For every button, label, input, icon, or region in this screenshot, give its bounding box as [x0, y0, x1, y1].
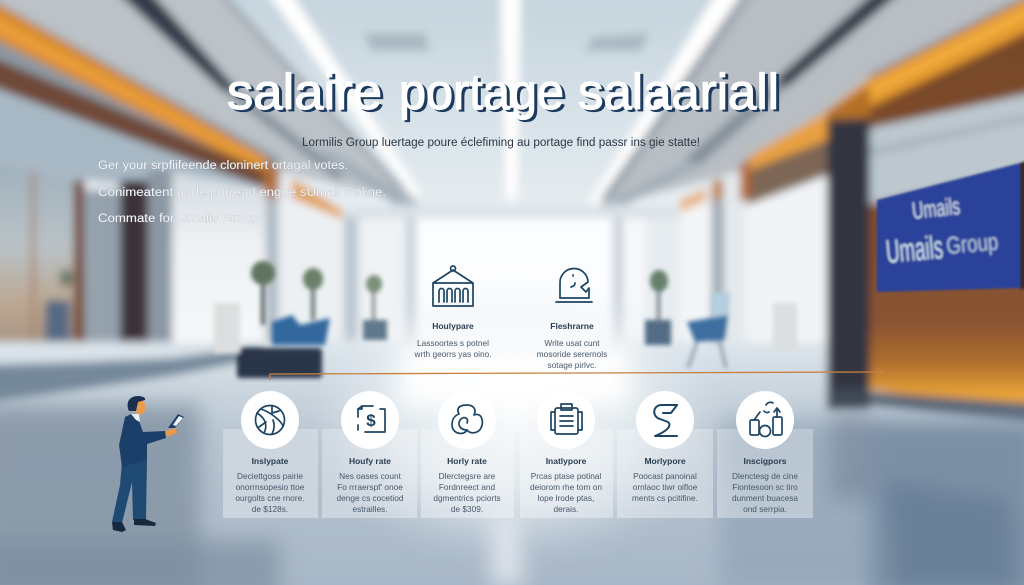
icon: chat laptop: [556, 268, 592, 302]
title: salaire: [230, 66, 385, 122]
title: salaire: [227, 64, 382, 120]
feature: Fleshrame: Wrlte usat cunt: [544, 338, 600, 348]
left glass door: [0, 160, 85, 375]
card: Inslypate: de $128s.: [252, 504, 288, 514]
card: Horly rate: dgmentrics pciorts: [433, 493, 501, 503]
left structural columns: [85, 190, 120, 355]
centre white opening: [415, 218, 615, 343]
wall sign: Umails Group: Umails: [911, 193, 961, 225]
card: Horly rate: Dlerctegsre are: [439, 471, 496, 481]
card: Inatlypore: [520, 391, 613, 518]
card: Inscigpors: ond serrpia.: [743, 504, 787, 514]
title: portage: [402, 66, 567, 122]
card: Inscigpors: [717, 391, 813, 518]
card: Morlypore: Morlypore: [644, 456, 686, 466]
feature: Houlypare: Houlypare: [432, 321, 474, 331]
person with phone: [112, 396, 184, 532]
back left walls: [172, 172, 266, 362]
icon: clipboard: [537, 391, 595, 449]
card: Houfy rate: Nes oases count: [339, 471, 402, 481]
card: Inslypate: [223, 391, 318, 518]
title: salaariall: [581, 66, 782, 122]
card: Inatlypore: Inatlypore: [546, 456, 587, 466]
card: Houfy rate: Fo rrraerspf' onoe: [337, 482, 403, 492]
wall sign: Umails Group: [877, 161, 1024, 292]
title: [227, 64, 782, 122]
left text block: [98, 160, 386, 225]
card: Inatlypore: deiorom rhe tom on: [530, 482, 602, 492]
legs: [112, 458, 147, 523]
feature: Fleshrame: Fleshrarne: [550, 321, 594, 331]
feature: Houlypare: Lassoortes s potnel: [417, 338, 489, 348]
wall sign: Umails Group: Group: [945, 229, 999, 260]
feature: Fleshrame: sotage pirlvc.: [548, 360, 596, 370]
card: Houfy rate: $: [366, 411, 376, 430]
floor: [0, 342, 1024, 585]
card: Inslypate: ourgolts cne rnore.: [235, 493, 305, 503]
title: salaariall: [578, 64, 779, 120]
card: Houfy rate: estrailles.: [352, 504, 388, 514]
icon: chart with coin: [736, 391, 794, 449]
ceiling lights: [258, 0, 422, 198]
jacket: [119, 414, 166, 467]
left wall top bands: [0, 0, 280, 190]
card: Inslypate: onorrnsopesio ttoe: [236, 482, 305, 492]
card: Houfy rate: [322, 391, 417, 518]
feature: Houlypare: [413, 266, 492, 359]
left text block: Commate for Umails Group: [98, 213, 259, 225]
card: Horly rate: Fordnreect and: [439, 482, 496, 492]
title: portage: [399, 64, 564, 120]
card: Inatlypore: lope lrode ptas,: [538, 493, 594, 503]
feature: Fleshrame: mosoride serernols: [537, 349, 607, 359]
feature: Houlypare: wrth georrs yas oino.: [413, 349, 492, 359]
grey bands above sign: [870, 90, 1024, 205]
hand and phone: [165, 428, 177, 437]
card: Morlypore: ments cs pcitifine.: [632, 493, 698, 503]
card: Inslypate: Deciettgoss pairie: [237, 471, 303, 481]
card: Inslypate: Inslypate: [252, 456, 289, 466]
card: Morlypore: ornlaoc tiwr oifloe: [633, 482, 698, 492]
head: [134, 400, 146, 414]
card: Inscigpors: dunment buacesa: [732, 493, 798, 503]
ceiling: [150, 0, 880, 215]
card: Inatlypore: Prcas ptase potinal: [531, 471, 601, 481]
connector arrow: [270, 370, 883, 380]
icon: dollar document: [341, 391, 399, 449]
card: Inscigpors: Fiontesoon sc tiro: [732, 482, 798, 492]
card: Inscigpors: Inscigpors: [744, 456, 787, 466]
shoes: [112, 519, 156, 532]
icon: building: [433, 266, 473, 306]
icon: linked cloud: [438, 391, 496, 449]
card: Horly rate: Horly rate: [447, 456, 487, 466]
card: Houfy rate: Houfy rate: [349, 456, 391, 466]
right ceiling slab: [600, 0, 1024, 208]
card: Horly rate: de $309.: [451, 504, 483, 514]
left text block: Ger your srpfiifeende cloninert ortagal votes.: [98, 160, 348, 172]
subtitle: Lormilis Group luertage poure éclefiming au portage find passr ins gie statte!: [302, 137, 700, 149]
furniture: [214, 261, 797, 378]
wall sign: Umails Group: Umails: [884, 228, 944, 270]
icon: stylised S: [636, 391, 694, 449]
right top orange strip: [825, 0, 1024, 130]
card: Inscigpors: Dlenctesg de cine: [732, 471, 798, 481]
dark column: [827, 112, 870, 392]
floor left band: [0, 346, 262, 405]
card: Houfy rate: denge cs cocetiod: [337, 493, 404, 503]
icon: globe: [241, 391, 299, 449]
card: Horly rate: [421, 391, 514, 518]
right walls: [680, 205, 712, 345]
right wood wall: [870, 10, 1024, 412]
soft floor shading: [0, 290, 1024, 585]
card: Morlypore: [617, 391, 713, 518]
card: Inatlypore: derais.: [554, 504, 578, 514]
card: Morlypore: Poocast panoinal: [633, 471, 697, 481]
feature: Fleshrame: [537, 268, 607, 370]
left ceiling slab: [0, 0, 420, 205]
left text block: Conimeatent uf de porread engue sUmail Online.: [98, 187, 386, 199]
